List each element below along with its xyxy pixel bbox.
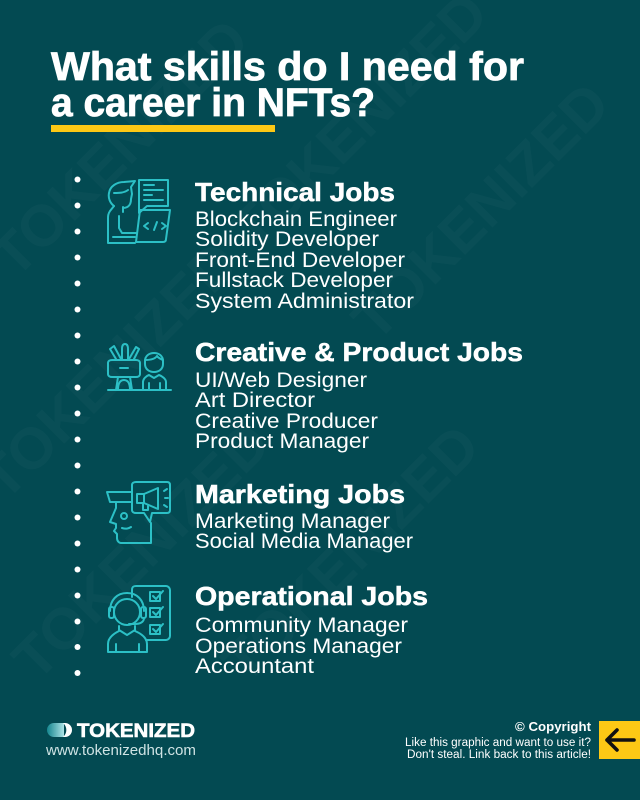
infographic canvas: TOKENIZED xyxy=(210,413,492,695)
copyright note xyxy=(405,719,592,761)
title xyxy=(51,45,524,125)
heading group: marketing jobs: Marketing Jobs xyxy=(195,479,405,509)
copyright note: Like this graphic and want to use it? xyxy=(405,737,591,749)
arrow badge xyxy=(599,721,640,759)
heading group: operational jobs: Operations Manager xyxy=(195,635,402,658)
title: a career in NFTs? xyxy=(51,81,375,125)
heading group: operational jobs: Community Manager xyxy=(195,614,408,637)
heading group: technical jobs xyxy=(195,177,414,313)
copyright note: Don't steal. Link back to this article! xyxy=(407,749,591,761)
heading group: technical jobs: Solidity Developer xyxy=(195,228,379,251)
icon: support agent with checklist xyxy=(108,586,170,652)
heading group: technical jobs: Front-End Developer xyxy=(195,249,405,272)
heading group: creative and product jobs: Creative & Product Jobs xyxy=(195,337,523,367)
heading group: operational jobs: Operational Jobs xyxy=(195,581,428,611)
icon: developer at laptop xyxy=(108,180,170,243)
heading group: creative and product jobs: Creative Producer xyxy=(195,410,378,433)
heading group: technical jobs: Blockchain Engineer xyxy=(195,208,397,231)
icon: designer at desk xyxy=(108,344,171,390)
heading group: creative and product jobs: Product Manager xyxy=(195,430,369,453)
heading group: marketing jobs: Marketing Manager xyxy=(195,510,390,533)
infographic canvas: TOKENIZED xyxy=(0,410,283,692)
heading group: marketing jobs xyxy=(195,479,413,553)
heading group: creative and product jobs xyxy=(195,337,523,453)
dotted timeline xyxy=(74,176,80,676)
copyright note: © Copyright xyxy=(515,719,592,734)
heading group: operational jobs: Accountant xyxy=(195,655,314,678)
title: What skills do I need for xyxy=(51,45,524,89)
footer logo: TOKENIZED xyxy=(77,721,195,742)
heading group: technical jobs: System Administrator xyxy=(195,290,414,313)
heading group: technical jobs: Technical Jobs xyxy=(195,177,395,207)
heading group: operational jobs xyxy=(195,581,428,678)
heading group: creative and product jobs: Art Director xyxy=(195,389,315,412)
icon: head with megaphone xyxy=(107,482,170,543)
heading group: marketing jobs: Social Media Manager xyxy=(195,530,413,553)
title underline xyxy=(51,125,275,132)
heading group: creative and product jobs: UI/Web Designer xyxy=(195,369,367,392)
heading group: technical jobs: Fullstack Developer xyxy=(195,269,393,292)
infographic canvas: TOKENIZED xyxy=(340,70,622,353)
footer website: www.tokenizedhq.com xyxy=(45,742,196,759)
